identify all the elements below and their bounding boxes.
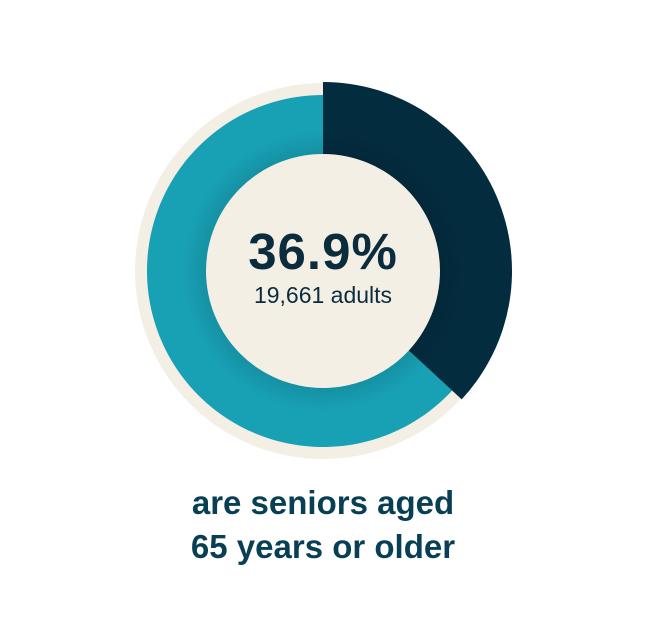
value label: 36.9% xyxy=(248,223,398,280)
caption: 65 years or older xyxy=(191,528,455,565)
caption xyxy=(191,484,455,565)
background ring xyxy=(135,83,511,459)
inner circle xyxy=(206,154,440,388)
segment: seniors 36.9% (dark) xyxy=(323,82,512,399)
value label: 19,661 adults xyxy=(254,282,392,308)
caption: are seniors aged xyxy=(192,484,454,521)
segment: others (teal) xyxy=(147,95,452,447)
value label xyxy=(248,223,398,308)
